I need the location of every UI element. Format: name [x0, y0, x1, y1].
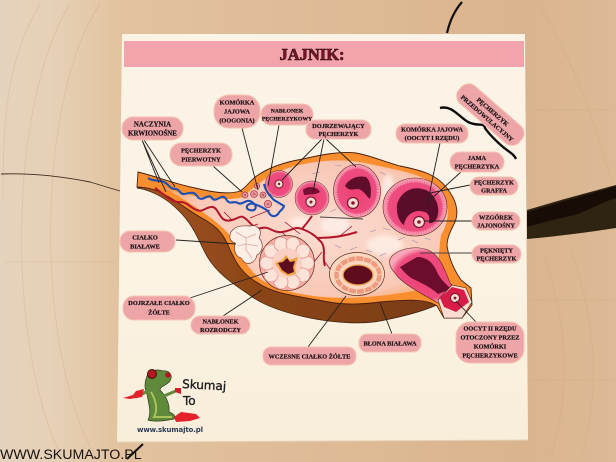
label: pęcherzyk przedowulacyjny: PRZEDOWULACYJNY [459, 94, 515, 144]
logo text: Skumaj: Skumaj [182, 377, 227, 393]
label: pęcherzyk Graffa: PĘCHERZYK [474, 180, 514, 186]
label: dojrzewający pęcherzyk: DOJRZEWAJĄCY [312, 123, 365, 130]
growing follicle 1 [266, 170, 292, 198]
label: nabłonek rozrodczy: ROZRODCZY [200, 327, 241, 334]
label: pęcherzyk Graffa: GRAFFA [481, 188, 507, 194]
label: pęknięty pęcherzyk: PĘCHERZYK [477, 256, 517, 262]
logo text: To: To [182, 394, 196, 408]
wood crack: top [447, 2, 462, 33]
ovary illustration [137, 152, 472, 323]
label: wzgórek jajonośny: WZGÓREK [479, 214, 513, 222]
blue blood vessels [148, 178, 284, 216]
label: naczynia krwionośne: KRWIONOŚNE [128, 130, 177, 138]
logo text: website: www.skumajto.pl [137, 426, 203, 434]
label: jama pęcherzyka [450, 152, 504, 172]
label: wczesne ciałko żółte: WCZESNE CIAŁKO ŻÓŁTE [269, 352, 350, 360]
early corpus luteum [330, 252, 384, 296]
wood crack: right [527, 185, 616, 239]
ovulated oocyte [438, 285, 472, 318]
label: jama pęcherzyka: JAMA [468, 155, 487, 162]
title band [124, 41, 524, 67]
pointer lines [142, 125, 476, 347]
label: wzgórek jajonośny: JAJONOŚNY [477, 222, 515, 230]
label: pęknięty pęcherzyk [472, 245, 521, 263]
pale tissue highlights [290, 174, 403, 255]
label: komórka jajowa (oocyt I rzędu): KOMÓRKA JAJOWA [401, 126, 463, 134]
label: oocyt II rzędu: PĘCHERZYKOWE [462, 352, 518, 360]
label: pęcherzyk pierwotny [170, 143, 232, 166]
label: oocyt II rzędu: OOCYT II RZĘDU [463, 326, 517, 332]
tissue squiggles [312, 165, 440, 265]
wood crack: bottom [127, 444, 143, 459]
board [117, 34, 528, 442]
label: dojrzewający pęcherzyk: PĘCHERZYK [319, 131, 359, 138]
label: wzgórek jajonośny [472, 212, 520, 230]
label: oocyt II rzędu: KOMÓRKI [474, 342, 507, 350]
Graafian follicle [383, 178, 447, 236]
orange body [137, 152, 472, 318]
label: pęcherzyk przedowulacyjny [453, 80, 528, 150]
label: pęcherzyk Graffa [470, 177, 518, 195]
label: pęcherzyk pierwotny: PIERWOTNY [181, 156, 221, 164]
fine vessels [224, 210, 352, 272]
label: komórka jajowa (oogonia): KOMÓRKA [220, 98, 255, 106]
label: pęcherzyk pierwotny: PĘCHERZYK [181, 148, 221, 154]
label: nabłonek pęcherzykowy: PĘCHERZYKOWY [262, 116, 312, 122]
inner pale tissue [165, 160, 448, 298]
label: komórka jajowa (oocyt I rzędu) [396, 124, 468, 143]
label: nabłonek rozrodczy: NABŁONEK [202, 318, 239, 326]
label: komórka jajowa (oogonia) [214, 95, 260, 128]
maturing follicle [334, 164, 380, 218]
label: nabłonek pęcherzykowy [261, 104, 313, 125]
label: ciałko białawe [120, 231, 175, 252]
label: oocyt II rzędu: OTOCZONY PRZEZ [461, 334, 519, 342]
wood crack: left [1, 174, 120, 191]
title: JAJNIK: [279, 45, 345, 64]
label: dojrzewający pęcherzyk [306, 120, 371, 139]
label: ciałko białawe: BIAŁAWE [130, 244, 160, 250]
label: dojrzałe ciałko żółte: DOJRZAŁE CIAŁKO [128, 300, 190, 307]
growing follicle 2 [295, 181, 329, 215]
corpus albicans [230, 226, 262, 263]
label: dojrzałe ciałko żółte [123, 296, 195, 320]
brace: preovulatory follicle [440, 107, 516, 159]
brown stroma [137, 186, 441, 323]
label: naczynia krwionośne: NACZYNIA [134, 122, 171, 128]
label: wczesne ciałko żółte [263, 347, 356, 365]
label: naczynia krwionośne [122, 117, 183, 140]
label: nabłonek rozrodczy [191, 316, 250, 334]
label: oocyt II rzędu [456, 322, 524, 363]
mature corpus luteum [260, 236, 314, 290]
label: ciałko białawe: CIAŁKO [132, 234, 158, 242]
red blood vessels [155, 188, 357, 266]
primordial follicles [242, 183, 272, 208]
label: błona biaława [359, 334, 421, 352]
label: nabłonek pęcherzykowy: NABŁONEK [271, 108, 304, 114]
label: pęcherzyk przedowulacyjny: PĘCHERZYK [475, 97, 510, 128]
label: jama pęcherzyka: PĘCHERZYKA [455, 164, 500, 170]
label: komórka jajowa (oogonia): (OOGONIA) [219, 118, 255, 124]
label: błona biaława: BŁONA BIAŁAWA [363, 340, 417, 348]
ruptured follicle [389, 248, 462, 304]
label: dojrzałe ciałko żółte: ŻÓŁTE [148, 308, 170, 316]
label: pęknięty pęcherzyk: PĘKNIĘTY [480, 248, 513, 254]
logo: frog mascot [123, 370, 200, 422]
label: komórka jajowa (oocyt I rzędu): (OOCYT I RZĘDU) [405, 135, 459, 142]
label: komórka jajowa (oogonia): JAJOWA [224, 108, 250, 116]
